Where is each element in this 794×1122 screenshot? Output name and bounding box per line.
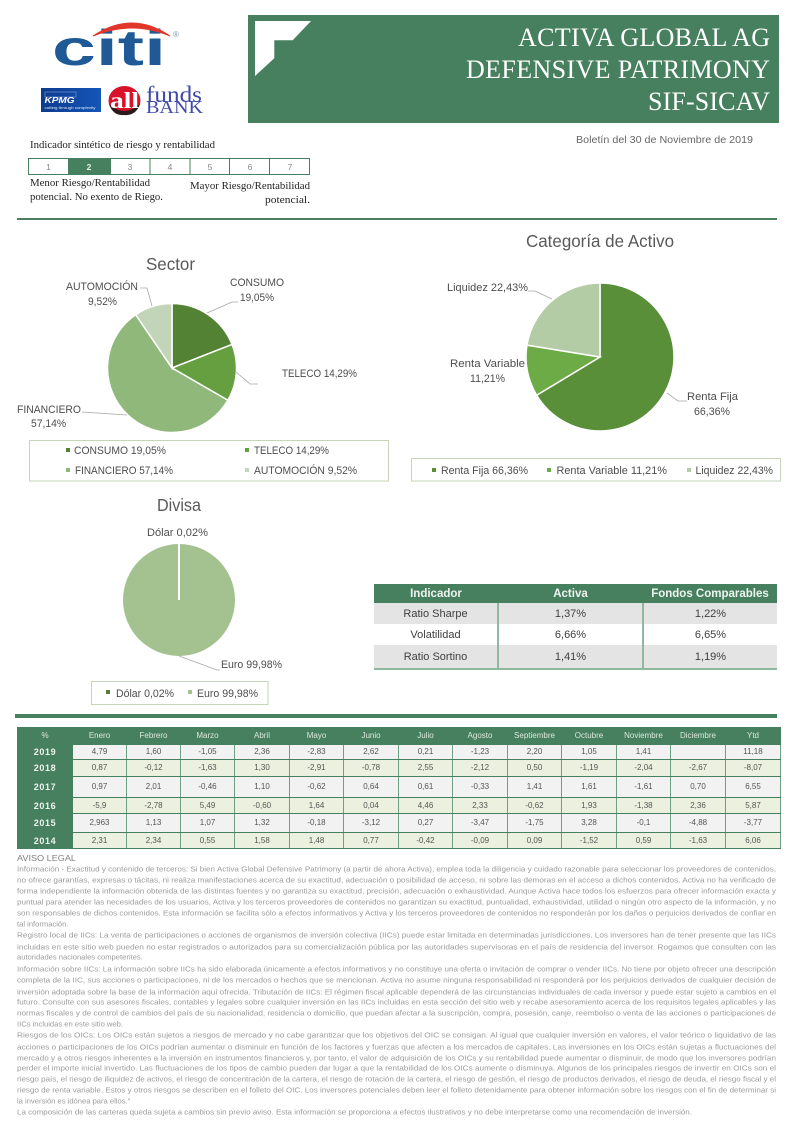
- monthly performance table: Febrero: [139, 731, 168, 740]
- Sector leader lines: [82, 288, 258, 415]
- monthly performance table: 3,28: [581, 818, 597, 827]
- legal body text: puntual para atender las necesidades de los usuarios, Activa y los terceros proveedores de contenidos no garantizan su exactitud, puntualidad, exhaustividad, utilidad o ningún otro aspecto de la información, y no: [17, 898, 776, 906]
- monthly performance table: 1,10: [254, 782, 270, 791]
- metrics table: [374, 584, 777, 670]
- legal body text: Información - Exactitud y contenido de terceros: Si bien Activa Global Defensive Patrimony (a partir de ahora Activa), emplea toda la diligencia y cuidado razonable para seleccionar los proveedores de contenidos,: [17, 864, 776, 874]
- Sector legend: AUTOMOCIÓN 9,52%: [254, 464, 357, 477]
- monthly performance table: -0,09: [471, 836, 489, 844]
- monthly performance table: 2,33: [472, 800, 488, 810]
- monthly performance table: 2,963: [89, 818, 110, 827]
- icon: white corner mark: [255, 21, 311, 76]
- monthly performance table: 1,07: [200, 818, 215, 827]
- monthly performance table: -0,62: [307, 782, 326, 791]
- monthly performance table: 2,55: [418, 763, 433, 772]
- logo: citi: [52, 20, 179, 70]
- legal body text: riesgo de renta variable. Estos y otros riesgos se describen en el folleto del OIC. Los inversores potenciales deben leer el folleto detenidamente para obtener información sobre los riesgos con el fin de determinar si: [17, 1086, 776, 1094]
- monthly performance table: -0,33: [471, 782, 489, 791]
- legal body text: completa de la IIC, sus acciones o participaciones, ni de los mercados o hechos que se mencionan. Activa no asume ninguna responsabilidad ni responderá por los perjuicios derivados de cualquier decisión de: [17, 976, 776, 984]
- monthly performance table: -5,9: [93, 800, 106, 810]
- Categoría slices: [526, 283, 674, 431]
- monthly performance table: -0,46: [198, 782, 217, 791]
- monthly performance table: 4,46: [418, 800, 433, 810]
- monthly performance table: %: [41, 731, 49, 740]
- monthly performance table: 0,50: [527, 763, 542, 772]
- monthly performance table: 0,59: [636, 836, 651, 844]
- logo: citi: ®: [173, 30, 179, 39]
- Sector labels: 19,05%: [240, 292, 274, 304]
- metrics table: 1,37%: [555, 608, 586, 620]
- Categoría labels: 11,21%: [470, 373, 505, 385]
- Categoría legend: Renta Fija 66,36%: [441, 465, 528, 477]
- monthly performance table: 1,48: [309, 836, 324, 844]
- legal body text: la inversión es idónea para ellos.": [17, 1096, 131, 1106]
- monthly performance table: -1,52: [580, 836, 598, 844]
- Divisa heading: Divisa: [157, 495, 201, 515]
- monthly performance table: 0,09: [527, 836, 542, 844]
- monthly performance table: 11,18: [743, 747, 763, 756]
- monthly performance table: 5,87: [745, 800, 761, 810]
- Sector legend: FINANCIERO 57,14%: [75, 465, 173, 477]
- legal body text: futuro. Consulte con sus asesores fiscales, contables y legales sobre cualquier inversión en las IICs incluidas en esta sección del sitio web y recabe asesoramiento acerca de los requisitos legales aplicables y las: [17, 998, 776, 1006]
- monthly performance table: 2,36: [254, 747, 270, 756]
- metrics table: 1,41%: [555, 650, 586, 662]
- legal heading: AVISO LEGAL: [17, 853, 76, 863]
- higher risk caption: Mayor Riesgo/Rentabilidad: [190, 180, 310, 192]
- monthly performance table: -3,47: [471, 818, 489, 827]
- chart: Divisa pie: [92, 495, 282, 704]
- legal body text: autoridades nacionales competentes.: [17, 952, 143, 962]
- lower risk caption: [30, 177, 163, 203]
- monthly performance table: Septiembre: [514, 731, 555, 740]
- metrics table: Fondos Comparables: [651, 588, 769, 600]
- monthly performance table: 1,60: [146, 747, 161, 756]
- Divisa slices: [123, 544, 235, 656]
- risk scale: 4: [168, 162, 173, 172]
- Divisa labels: [147, 527, 282, 671]
- Sector labels: AUTOMOCIÓN: [66, 280, 138, 293]
- monthly performance table: 1,13: [146, 818, 161, 827]
- legal body text: IICs incluidas en este sitio web.: [17, 1020, 123, 1028]
- legal body text: Registro local de IICs: La venta de participaciones o acciones de organismos de inversión colectiva (IICs) puede estar limitada en determinadas jurisdicciones. Los inversores han de tener presente que las IICs: [17, 930, 776, 940]
- monthly performance table: 1,41: [527, 782, 542, 791]
- monthly performance table: 2014: [34, 836, 56, 846]
- title: [466, 23, 770, 116]
- metrics table: Activa: [553, 588, 588, 600]
- metrics table: Volatilidad: [410, 628, 461, 640]
- monthly performance table: -2,78: [144, 800, 163, 810]
- monthly performance table: Abril: [254, 731, 270, 740]
- title: ACTIVA GLOBAL AG: [518, 23, 770, 52]
- Divisa leader line: [179, 656, 220, 670]
- monthly performance table: -0,60: [253, 800, 271, 810]
- chart: Categoría de Activo pie: [412, 231, 780, 481]
- monthly performance table: 1,64: [309, 800, 324, 810]
- monthly performance table: -2,91: [307, 763, 326, 772]
- monthly performance table: -0,62: [525, 800, 544, 810]
- lower risk caption: Menor Riesgo/Rentabilidad: [30, 177, 150, 189]
- monthly performance table: 0,97: [92, 782, 107, 791]
- Sector labels: 57,14%: [31, 418, 66, 430]
- Sector legend: TELECO 14,29%: [254, 445, 329, 457]
- monthly performance table: 0,21: [418, 747, 433, 756]
- risk scale: 1: [46, 162, 51, 172]
- legal body text: son responsables de dichos contenidos. Esta información se facilita sólo a efectos informativos y Activa y los terceros proveedores de contenidos no responderán por los daños o perjuicios derivados de confiar en: [17, 908, 776, 918]
- risk scale: 3: [128, 162, 133, 172]
- logo: KPMG: cutting through complexity: [44, 106, 96, 110]
- monthly performance table: Marzo: [196, 731, 219, 740]
- legal body text: tal información.: [17, 920, 68, 928]
- Sector labels: FINANCIERO: [17, 404, 81, 416]
- legal body text: Riesgos de los OICs: Los OICs están sujetos a riesgos de mercado y no cabe garantizar que los objetivos del OIC se consigan. Al igual que cualquier inversión en valores, el valor teórico o liquidativo de las: [17, 1030, 776, 1040]
- Categoría labels: Renta Fija: [687, 391, 739, 403]
- monthly performance table: -1,63: [198, 763, 217, 772]
- title: DEFENSIVE PATRIMONY: [466, 55, 770, 84]
- monthly performance table: 2019: [34, 747, 56, 757]
- monthly performance table: Julio: [417, 731, 434, 740]
- monthly performance table: 0,04: [363, 800, 379, 810]
- metrics table: 1,19%: [695, 650, 726, 662]
- metrics table: 1,22%: [695, 608, 726, 620]
- monthly performance table: -2,12: [471, 763, 489, 772]
- monthly performance table: -1,75: [525, 818, 544, 827]
- higher risk caption: potencial.: [265, 194, 310, 206]
- legal body text: mercado y a otros riesgos inherentes a la inversión en instrumentos financieros y, por tanto, el valor de adquisición de los OICs y su rentabilidad puede aumentar o disminuir, de modo que los inversores podrían: [17, 1054, 776, 1062]
- legal body text: perder el importe inicial invertido. Las fluctuaciones de los tipos de cambio pueden dar lugar a que la rentabilidad de los OICs aumente o disminuya. Algunos de los principales riesgos de invertir en OICs son el: [17, 1064, 776, 1072]
- logo: KPMG: [41, 88, 101, 112]
- metrics table: Ratio Sortino: [404, 650, 467, 662]
- middle divider: [15, 714, 777, 718]
- risk indicator: [28, 140, 310, 206]
- monthly performance table: -2,83: [307, 747, 326, 756]
- monthly performance table: 1,30: [254, 763, 270, 772]
- legal body text: no ofrece garantías, expresas o tácitas, ni realiza manifestaciones acerca de su exactitud, adecuación o posibilidad de acceso, ni sobre las demoras en el acceso a dichos contenidos. Activa no ha verificado de: [17, 876, 776, 884]
- monthly performance table: 0,61: [418, 782, 433, 791]
- monthly performance table: 5,49: [200, 800, 215, 810]
- legal body text: [17, 864, 776, 1116]
- metrics table: Ratio Sharpe: [403, 608, 468, 620]
- monthly performance table: 2,20: [527, 747, 542, 756]
- Divisa labels: Dólar 0,02%: [147, 527, 208, 539]
- Sector labels: CONSUMO: [230, 277, 284, 289]
- monthly performance table: -2,04: [634, 763, 653, 772]
- monthly performance table: 1,58: [254, 836, 270, 844]
- Categoría legend: [412, 458, 780, 481]
- monthly performance table: 1,93: [581, 800, 597, 810]
- monthly performance table: 2015: [34, 818, 56, 828]
- monthly performance table: -0,18: [307, 818, 326, 827]
- legal body text: acciones o participaciones de los OICs podrían aumentar o disminuir en función de los factores y fuerzas que afecten a los mercados de capitales. Las inversiones en los OICs están sujetas a fluctuaciones del: [17, 1042, 776, 1052]
- Categoría labels: 66,36%: [694, 406, 730, 418]
- Sector labels: TELECO 14,29%: [282, 368, 357, 380]
- chart: Sector pie: [17, 254, 388, 481]
- Sector heading: Sector: [146, 254, 195, 274]
- legal body text: forma independiente la información obtenida de las distintas fuentes y no garantiza su exactitud, precisión, adecuación o exhaustividad. Aunque Activa hace todos los esfuerzos para ofrecer información exacta y: [17, 886, 776, 896]
- title: SIF-SICAV: [648, 87, 770, 116]
- monthly performance table: 0,70: [690, 782, 706, 791]
- monthly performance table: Mayo: [307, 731, 326, 740]
- monthly performance table: -3,77: [744, 818, 762, 827]
- legal notice: [17, 853, 776, 1116]
- monthly performance table: -1,38: [634, 800, 653, 810]
- monthly performance table: -1,23: [471, 747, 489, 756]
- risk heading: Indicador sintético de riesgo y rentabilidad: [30, 140, 216, 151]
- Categoría legend: Renta Variable 11,21%: [556, 465, 667, 477]
- monthly performance table: -8,07: [744, 763, 762, 772]
- Categoría labels: Liquidez 22,43%: [447, 282, 528, 294]
- monthly performance table: Enero: [89, 731, 110, 740]
- higher risk caption: [190, 180, 310, 206]
- monthly performance table: -4,88: [689, 818, 707, 827]
- monthly performance table: 2,36: [690, 800, 706, 810]
- monthly performance table: -0,1: [637, 818, 650, 827]
- Categoría legend: Liquidez 22,43%: [696, 465, 773, 477]
- monthly performance table: Diciembre: [680, 731, 716, 740]
- metrics table: Indicador: [410, 588, 462, 600]
- monthly performance table: Octubre: [575, 731, 603, 740]
- legal body text: inversión adoptada sobre la base de la información aquí ofrecida. Tributación de IICs: El régimen fiscal aplicable dependerá de las circunstancias individuales de cada inversor y puede estar sujeto a cambios en el: [17, 988, 776, 996]
- monthly performance table: 2,01: [146, 782, 161, 791]
- monthly performance table: 6,55: [745, 782, 761, 791]
- monthly performance table: Junio: [361, 731, 381, 740]
- top divider: [17, 218, 777, 220]
- monthly performance table: [17, 727, 781, 849]
- monthly performance table: 1,61: [581, 782, 597, 791]
- monthly performance table: 0,64: [363, 782, 379, 791]
- Sector legend: CONSUMO 19,05%: [74, 445, 166, 457]
- Sector slices: [108, 303, 237, 433]
- monthly performance table: 6,06: [745, 836, 761, 844]
- risk scale: [28, 158, 310, 174]
- monthly performance table: 2017: [34, 782, 56, 792]
- monthly performance table: -1,19: [580, 763, 598, 772]
- Sector labels: 9,52%: [88, 296, 117, 308]
- Divisa legend: Euro 99,98%: [197, 688, 258, 700]
- monthly performance table: 0,27: [418, 818, 433, 827]
- bulletin date: Boletín del 30 de Noviembre de 2019: [576, 134, 753, 146]
- header banner: [248, 15, 779, 123]
- monthly performance table: Noviembre: [624, 731, 663, 740]
- monthly performance table: 4,79: [92, 747, 107, 756]
- monthly performance table: 0,87: [92, 763, 107, 772]
- metrics table: 6,66%: [555, 628, 586, 640]
- legal body text: normas fiscales y de control de cambios del país de su nacionalidad, residencia o domicilio, que puedan afectar a la suscripción, compra, posesión, canje, reembolso o venta de las acciones o participaciones de: [17, 1008, 776, 1018]
- monthly performance table: Ytd: [747, 731, 759, 740]
- monthly performance table: -0,12: [144, 763, 163, 772]
- risk scale: 5: [208, 162, 213, 172]
- monthly performance table: 1,41: [636, 747, 651, 756]
- monthly performance table: 2,31: [92, 836, 107, 844]
- Divisa legend: [92, 682, 268, 704]
- monthly performance table: -1,61: [634, 782, 653, 791]
- monthly performance table: 0,55: [200, 836, 215, 844]
- logo: KPMG: KPMG: [44, 96, 74, 105]
- monthly performance table: 2,62: [363, 747, 379, 756]
- monthly performance table: -2,67: [689, 763, 707, 772]
- metrics table: 6,65%: [695, 628, 726, 640]
- monthly performance table: 2018: [34, 763, 56, 773]
- Categoría heading: Categoría de Activo: [526, 231, 674, 251]
- legal body text: La composición de las carteras queda sujeta a cambios sin previo aviso. Esta información se proporciona a efectos ilustrativos y no debe interpretarse como una recomendación de inversión.: [17, 1108, 692, 1116]
- legal body text: riesgo país, el riesgo de iliquidez de activos, el riesgo de concentración de la cartera, el riesgo de rotación de la cartera, el riesgo de gestión, el riesgo de productos derivados, el riesgo de deuda, el riesgo fiscal y el: [17, 1074, 776, 1084]
- monthly performance table: -1,63: [689, 836, 707, 844]
- logo: allfunds bank: [108, 84, 203, 116]
- monthly performance table: 1,32: [254, 818, 270, 827]
- monthly performance table: -0,78: [362, 763, 380, 772]
- risk scale: 7: [288, 162, 293, 172]
- monthly performance table: 0,77: [363, 836, 379, 844]
- legal body text: Información sobre IICs: La información sobre IICs ha sido elaborada únicamente a efectos informativos y no constituye una oferta o invitación de comprar o vender IICs. No tiene por objeto ofrecer una descripción: [17, 964, 776, 974]
- risk scale: 2: [87, 162, 92, 172]
- monthly performance table: -0,42: [416, 836, 435, 844]
- logo: allfunds bank: all: [110, 88, 139, 113]
- Sector legend: [30, 440, 388, 481]
- monthly performance table: 2,34: [146, 836, 161, 844]
- risk scale: 6: [248, 162, 253, 172]
- lower risk caption: potencial. No exento de Riego.: [30, 191, 163, 203]
- monthly performance table: 2016: [34, 800, 56, 810]
- Categoría labels: Renta Variable: [450, 358, 525, 370]
- charts layer: [17, 231, 781, 705]
- Divisa labels: Euro 99,98%: [221, 659, 282, 671]
- monthly performance table: 1,05: [581, 747, 597, 756]
- Categoría leader lines: [528, 291, 687, 401]
- Divisa legend: Dólar 0,02%: [116, 688, 174, 700]
- Categoría labels: [447, 282, 739, 418]
- monthly performance table: -1,05: [198, 747, 217, 756]
- monthly performance table: -3,12: [362, 818, 380, 827]
- Sector labels: [17, 277, 357, 430]
- monthly performance table: Agosto: [468, 731, 492, 740]
- legal body text: incluidas en este sitio web pueden no estar registrados o autorizados para su comercialización pública por las autoridades supervisoras en el país de residencia del inversor. Rogamos que consulten con las: [17, 942, 776, 952]
